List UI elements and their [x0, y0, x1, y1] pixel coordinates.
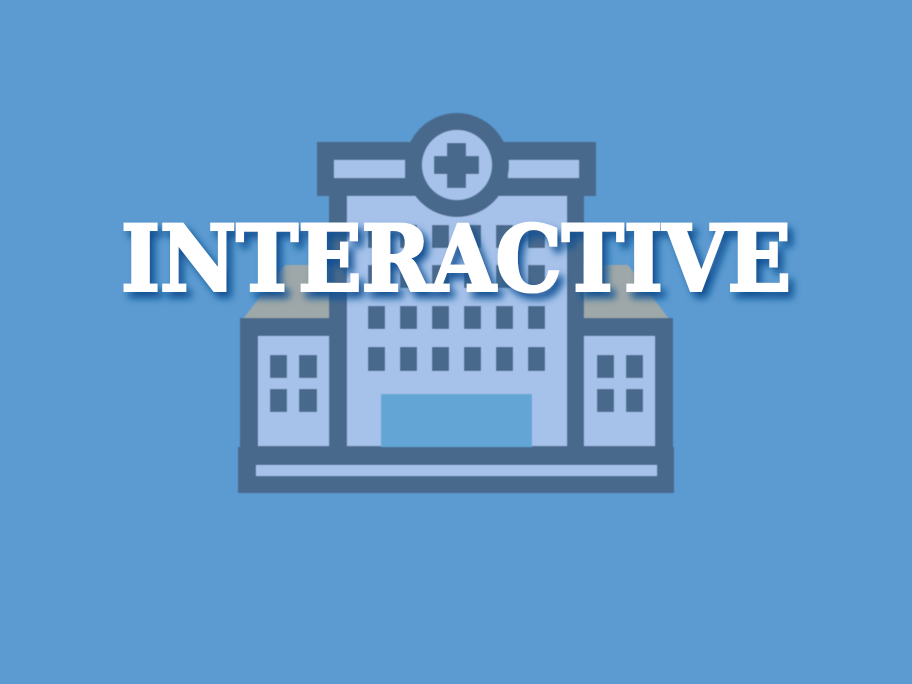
tower windows [368, 225, 545, 371]
right wing [582, 318, 673, 453]
icon: hospital building [238, 113, 674, 493]
header sign [317, 113, 596, 217]
icon: medical cross [434, 143, 479, 188]
central tower [329, 190, 584, 452]
left wing [240, 318, 332, 453]
right wing roof [584, 265, 669, 319]
left wing roof [243, 265, 330, 319]
entrance door [381, 394, 532, 447]
title: INTERACTIVE [121, 206, 791, 312]
base platform [238, 447, 674, 493]
